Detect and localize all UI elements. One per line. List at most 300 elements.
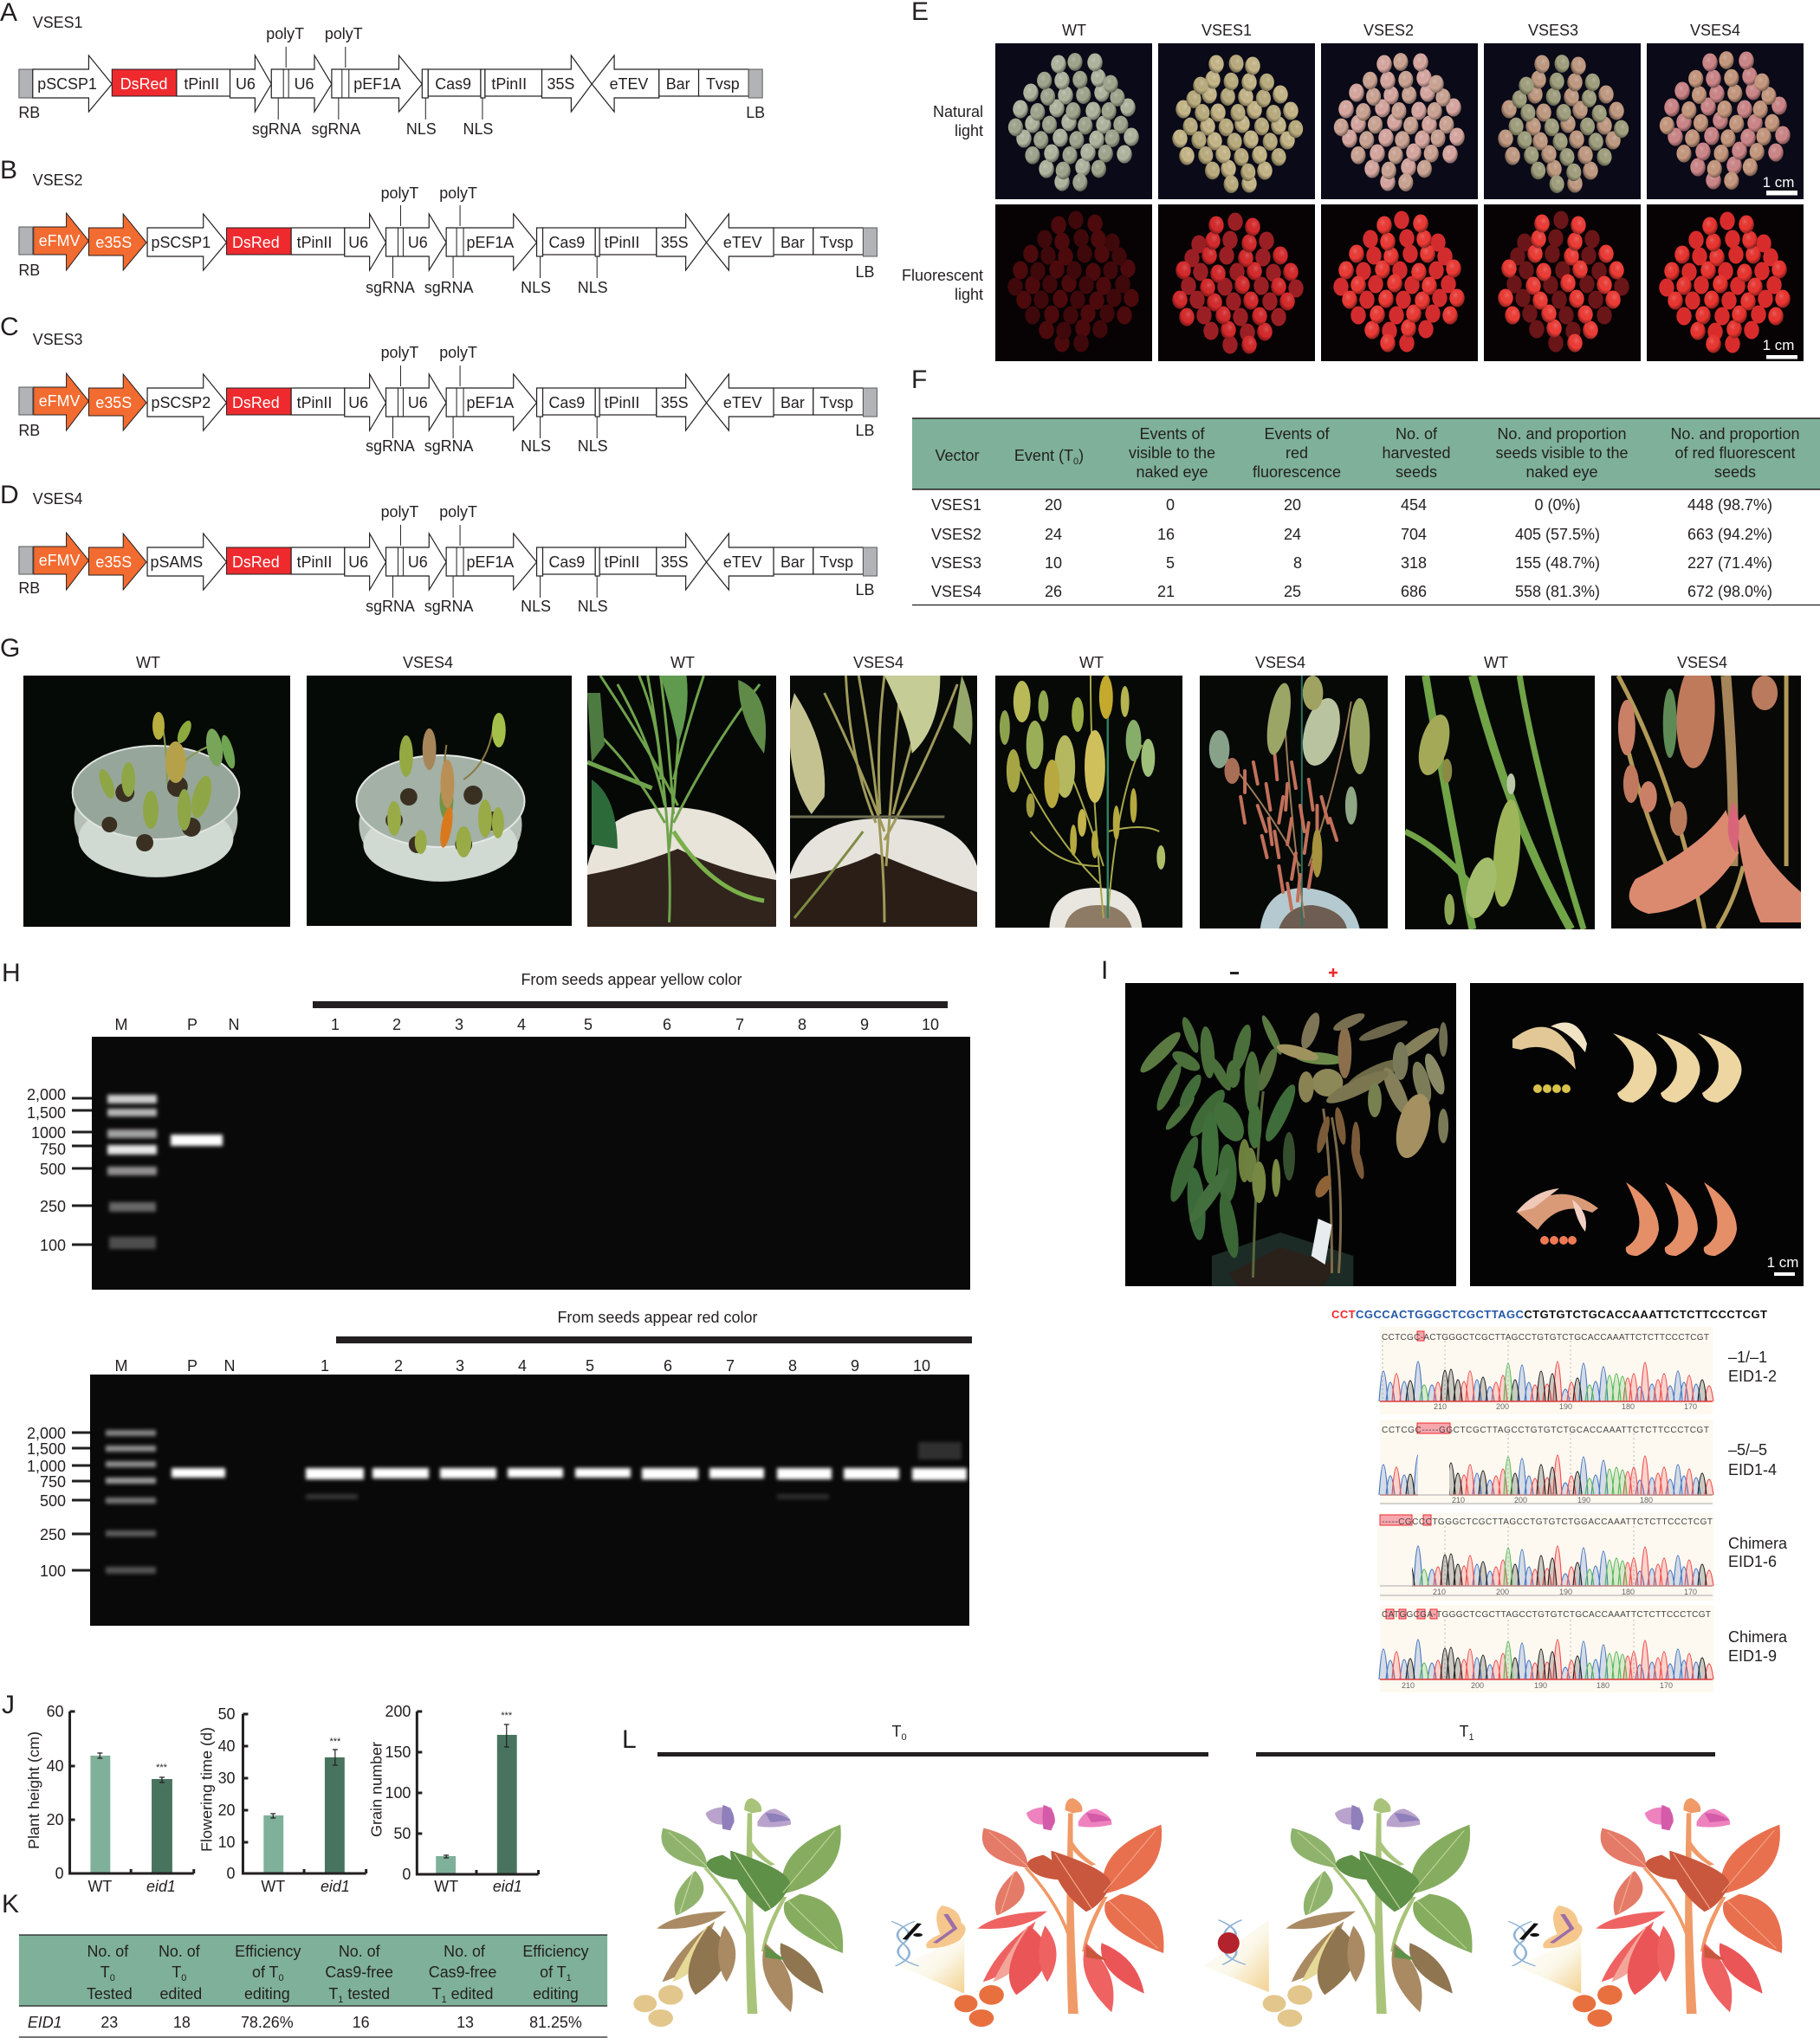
panel F: table of seed colour statistics: 20 — [1045, 496, 1062, 514]
gel 1 lane labels: 5 — [584, 1016, 593, 1033]
panel K: editing efficiency table: 0 — [181, 1973, 186, 1983]
chromatogram: EID1-6: 180 — [1622, 1588, 1635, 1596]
genotype label EID1-4: –5/–5 — [1728, 1441, 1767, 1459]
panel D: VSES4 construct: LB — [856, 581, 874, 598]
panel A: VSES1 construct: polyT — [325, 25, 363, 42]
panel A: VSES1 construct: DsRed — [120, 75, 167, 93]
panel C: VSES3 construct: Bar — [780, 394, 805, 411]
photo: yellow and red pods with seeds — [1470, 983, 1804, 1286]
seed photo: VSES4 natural light — [1647, 43, 1804, 199]
chromatogram: EID1-9: 210 — [1402, 1681, 1415, 1690]
gel 2 lane labels: N — [223, 1357, 236, 1375]
T1 heading: 1 — [1468, 1732, 1474, 1743]
panel A: VSES1 construct: tPinII — [184, 75, 219, 93]
panel F: table of seed colour statistics: 686 — [1401, 583, 1427, 600]
panel K: editing efficiency table: 1 — [567, 1973, 572, 1983]
chromatogram: EID1-6: 210 — [1433, 1588, 1446, 1596]
seed photo: VSES4 natural light: 1 cm — [1763, 174, 1794, 191]
bar chart: grain number — [368, 1703, 539, 1895]
panel E: row labels: light — [955, 122, 983, 139]
panel A: VSES1 construct: Bar — [666, 75, 690, 93]
gel 2 lane labels: 8 — [788, 1357, 797, 1375]
panel K: editing efficiency table: Efficiency — [235, 1943, 301, 1960]
panel C: VSES3 construct: pEF1A — [467, 394, 514, 411]
panel A: VSES1 construct: tPinII — [491, 75, 527, 93]
panel A: VSES1 construct: sgRNA — [312, 120, 360, 138]
gel 1 size markers: 250 — [40, 1198, 66, 1215]
panel F: table of seed colour statistics: 454 — [1401, 496, 1427, 514]
panel F: table of seed colour statistics: 663 (94.2%) — [1687, 526, 1772, 543]
panel F: table of seed colour statistics: seeds — [1714, 463, 1756, 481]
seed photo: VSES3 natural light — [1484, 43, 1641, 199]
panel F: table of seed colour statistics: 405 (57.5%) — [1515, 526, 1600, 543]
panel E: row labels: Natural — [933, 103, 983, 120]
bar chart: plant height: WT — [87, 1878, 112, 1895]
panel F: table of seed colour statistics: 318 — [1401, 554, 1427, 572]
panel F: table of seed colour statistics: seeds — [1396, 463, 1437, 481]
panel F: table of seed colour statistics: Vector — [935, 447, 980, 464]
photo: WT stem base in white pot — [587, 676, 776, 927]
seed photo: VSES2 fluorescence — [1321, 204, 1478, 361]
bar chart: plant height — [25, 1703, 194, 1895]
panel K: editing efficiency table: Tested — [87, 1985, 133, 2002]
chromatogram: EID1-9: CATGGCGA-TGGGCTCGCTTAGCCTGTGTCTGCACCAAATTCTCTTCCCTCGT — [1382, 1610, 1711, 1620]
panel C: VSES3 construct: e35S — [95, 394, 132, 411]
panel E: seed column headings: VSES2 — [1363, 22, 1414, 39]
panel F: table of seed colour statistics: 5 — [1166, 554, 1175, 572]
T1 heading: T — [1459, 1723, 1468, 1740]
gel 2 size markers: 1,500 — [27, 1440, 66, 1458]
photo: VSES4 plantlets in dish — [307, 676, 572, 926]
panel C: VSES3 construct: VSES3 — [33, 331, 82, 348]
panel B: VSES2 construct: NLS — [578, 279, 608, 296]
photo: VSES4 red pods close-up — [1611, 676, 1801, 928]
panel E: row labels — [902, 103, 983, 303]
gel 1 lane labels: 4 — [517, 1016, 526, 1033]
gel 2 size markers: 250 — [40, 1526, 66, 1543]
panel F: table of seed colour statistics: No. of — [1396, 425, 1438, 443]
bar chart: plant height: 40 — [47, 1757, 64, 1775]
bar chart: grain number: 150 — [385, 1744, 411, 1761]
panel B: VSES2 construct: U6 — [348, 234, 368, 251]
chromatogram: EID1-4: 210 — [1452, 1496, 1465, 1504]
panel D: VSES4 construct: RB — [18, 579, 40, 597]
gel 1 lane labels: 3 — [455, 1016, 463, 1033]
panel letter J: J — [2, 1691, 15, 1719]
panel D: VSES4 construct: sgRNA — [366, 598, 415, 615]
panel K: editing efficiency table: 13 — [457, 2014, 474, 2031]
genotype label EID1-9: EID1-9 — [1728, 1647, 1777, 1665]
panel K: editing efficiency table: EID1 — [28, 2014, 62, 2031]
panel D: VSES4 construct: 35S — [661, 553, 689, 571]
panel D: VSES4 construct: NLS — [521, 598, 551, 615]
gel 2 lane labels: 1 — [321, 1357, 329, 1375]
chromatogram: EID1-4: 180 — [1640, 1496, 1653, 1504]
gel 1 lane labels: 6 — [663, 1016, 671, 1033]
panel F: table of seed colour statistics: VSES1 — [931, 496, 981, 514]
chromatogram: EID1-6: 170 — [1684, 1588, 1697, 1596]
gel 2 lane labels — [114, 1357, 930, 1375]
panel D: VSES4 construct: Cas9 — [549, 553, 585, 571]
panel A: VSES1 construct: U6 — [236, 75, 256, 93]
bar chart: grain number: 100 — [385, 1784, 411, 1802]
panel F: table of seed colour statistics: No. and proportion — [1497, 425, 1627, 443]
panel F: table of seed colour statistics: 24 — [1284, 526, 1301, 543]
photo: WT green pods close-up — [1405, 676, 1595, 929]
gel 2 lane labels: P — [187, 1357, 198, 1375]
panel F: table of seed colour statistics: VSES2 — [931, 526, 981, 543]
panel E: seed column headings: VSES1 — [1201, 22, 1252, 39]
panel C: VSES3 construct: sgRNA — [424, 437, 473, 455]
panel letter D: D — [0, 481, 19, 509]
panel E: seed column headings: WT — [1062, 22, 1086, 39]
minus sign — [1230, 972, 1239, 974]
panel F: table of seed colour statistics: red — [1286, 444, 1308, 462]
panel D: VSES4 construct: VSES4 — [33, 490, 82, 508]
panel G: photo headings: VSES4 — [403, 654, 453, 671]
panel letter H: H — [2, 959, 21, 987]
panel B: VSES2 construct: tPinII — [297, 234, 332, 251]
bar chart: flowering time: WT — [261, 1878, 285, 1895]
bar chart: plant height: 60 — [47, 1703, 64, 1720]
panel K: editing efficiency table: edited — [447, 1985, 493, 2002]
panel A: VSES1 construct: 35S — [547, 75, 574, 93]
panel C: VSES3 construct: polyT — [439, 344, 477, 361]
bar chart: flowering time: Flowering time (d) — [198, 1727, 216, 1852]
panel A: VSES1 construct: sgRNA — [252, 120, 301, 138]
chromatogram: EID1-6: -----CGCCCTGGGCTCGCTTAGCCTGTGTCTGGACCAAATTCTCTTCCCTCGT — [1382, 1517, 1713, 1527]
photo: yellow and red pods with seeds: 1 cm — [1767, 1254, 1798, 1271]
panel K: editing efficiency table: editing — [244, 1985, 290, 2002]
icon: DNA scissors and protein with light cone, first — [891, 1905, 966, 1994]
panel G: photo headings — [136, 654, 1727, 671]
T0 heading: T — [891, 1723, 901, 1740]
panel D: VSES4 construct — [18, 490, 877, 615]
T1 bar — [1256, 1752, 1715, 1757]
panel B: VSES2 construct: DsRed — [232, 234, 280, 251]
gel 2 lane labels: 10 — [913, 1357, 930, 1375]
panel C: VSES3 construct: eTEV — [723, 394, 762, 411]
gel 1 lane labels: 1 — [331, 1016, 340, 1033]
seed photo: VSES3 fluorescence — [1484, 204, 1641, 361]
panel A: VSES1 construct: Tvsp — [706, 75, 740, 93]
chromatogram: EID1-6 — [1377, 1513, 1713, 1601]
panel K: editing efficiency table: edited — [159, 1985, 202, 2002]
panel C: VSES3 construct: 35S — [661, 394, 689, 411]
panel G: photo headings: WT — [670, 654, 695, 671]
panel B: VSES2 construct: eFMV — [39, 232, 81, 249]
panel F: table of seed colour statistics: seeds visible to the — [1495, 444, 1629, 462]
illustration: red-seed plant T0 — [955, 1798, 1163, 2027]
gel 1 lane labels: 9 — [860, 1016, 869, 1033]
panel E: seed column headings: VSES3 — [1528, 22, 1578, 39]
bar chart: plant height: eid1 — [146, 1878, 176, 1895]
panel K: editing efficiency table: T — [100, 1964, 110, 1981]
gel 2 lane labels: 5 — [586, 1357, 594, 1375]
panel F: table of seed colour statistics: 0 — [1166, 496, 1175, 514]
panel C: VSES3 construct — [18, 331, 877, 455]
panel B: VSES2 construct: pSCSP1 — [152, 234, 210, 251]
bar chart: plant height: 20 — [47, 1811, 64, 1828]
panel letter G: G — [0, 634, 20, 663]
chromatogram: EID1-9: 190 — [1534, 1681, 1547, 1690]
seed photo: WT fluorescence — [995, 204, 1152, 361]
panel letter L: L — [622, 1725, 637, 1754]
panel G: photo headings: WT — [1484, 654, 1508, 671]
chromatogram: EID1-4: 200 — [1514, 1496, 1527, 1504]
seed photo: VSES4 fluorescence — [1647, 204, 1804, 361]
panel B: VSES2 construct: Cas9 — [549, 234, 585, 251]
gel 2 size markers: 500 — [40, 1492, 66, 1510]
gel 1 size markers: 2,000 — [27, 1086, 66, 1103]
panel B: VSES2 construct: RB — [18, 262, 40, 279]
panel B: VSES2 construct: 35S — [661, 234, 689, 251]
panel letter I: I — [1101, 956, 1108, 985]
panel K: editing efficiency table: of T — [252, 1964, 278, 1981]
panel B: VSES2 construct — [18, 171, 877, 296]
panel G: photo headings: WT — [1079, 654, 1104, 671]
panel C: VSES3 construct: sgRNA — [366, 437, 415, 455]
panel D: VSES4 construct: eTEV — [723, 553, 762, 571]
chromatogram: EID1-2: 190 — [1559, 1402, 1572, 1411]
panel B: VSES2 construct: Tvsp — [819, 234, 853, 251]
T0 bar — [657, 1752, 1208, 1757]
panel F: table of seed colour statistics: No. and proportion — [1670, 425, 1800, 443]
chromatogram: EID1-2 — [1379, 1327, 1713, 1414]
gel 1 lane labels: 8 — [798, 1016, 806, 1033]
gel 1 title: yellow seeds: From seeds appear yellow color — [521, 971, 742, 988]
panel C: VSES3 construct: LB — [856, 422, 874, 439]
panel G: photo headings: VSES4 — [853, 654, 904, 671]
panel C: VSES3 construct: Cas9 — [549, 394, 585, 411]
panel F: table of seed colour statistics: ) — [1078, 447, 1084, 464]
panel F: table of seed colour statistics: 26 — [1045, 583, 1062, 600]
panel A: VSES1 construct: RB — [18, 104, 40, 121]
panel E: row labels: light — [955, 286, 983, 303]
panel C: VSES3 construct: U6 — [348, 394, 368, 411]
gel 1 size markers: 500 — [40, 1161, 66, 1178]
seed photo: WT natural light — [995, 43, 1152, 199]
bar chart: flowering time — [198, 1705, 366, 1895]
panel G: photo headings: VSES4 — [1255, 654, 1305, 671]
gel 2 image — [90, 1375, 969, 1626]
bar chart: flowering time: 10 — [218, 1834, 236, 1851]
gel 1 sample bar — [313, 1001, 948, 1008]
panel D: VSES4 construct: DsRed — [232, 553, 280, 571]
panel A: VSES1 construct: NLS — [406, 120, 437, 138]
panel G: photo headings: VSES4 — [1677, 654, 1727, 671]
gel 2 size markers: 750 — [40, 1473, 66, 1491]
gel 2 lane labels: M — [114, 1357, 128, 1375]
genotype label EID1-4: EID1-4 — [1728, 1461, 1777, 1478]
panel A: VSES1 construct: U6 — [295, 75, 314, 93]
gel 1 size markers: 1,500 — [27, 1104, 66, 1122]
panel F: table of seed colour statistics: VSES4 — [931, 583, 981, 600]
gel 1 size markers: 750 — [40, 1141, 66, 1158]
gel 1 size markers: 1000 — [31, 1124, 66, 1142]
gel 1 lane labels: M — [114, 1016, 128, 1033]
panel C: VSES3 construct: DsRed — [232, 394, 280, 411]
gel 2 lane labels: 6 — [664, 1357, 672, 1375]
panel C: VSES3 construct: NLS — [521, 437, 551, 455]
target sequence: CCTCGCCACTGGGCTCGCTTAGCCTGTGTCTGCACCAAATTCTCTTCCCTCGT — [1331, 1308, 1767, 1321]
panel F: table of seed colour statistics: 0 (0%) — [1534, 496, 1581, 514]
panel F: table of seed colour statistics: 704 — [1401, 526, 1427, 543]
bar chart: flowering time: 30 — [218, 1770, 236, 1787]
panel A: VSES1 construct: pEF1A — [353, 75, 401, 93]
gel 2 lane labels: 2 — [394, 1357, 403, 1375]
panel K: editing efficiency table: T — [172, 1964, 181, 1981]
panel B: VSES2 construct: e35S — [95, 234, 132, 251]
panel K: editing efficiency table: No. of — [87, 1943, 129, 1960]
panel F: table of seed colour statistics: 558 (81.3%) — [1515, 583, 1600, 600]
gel 2 title: red seeds: From seeds appear red color — [557, 1309, 758, 1326]
panel A: VSES1 construct: pSCSP1 — [37, 75, 97, 93]
genotype label EID1-6 — [1728, 1535, 1788, 1570]
panel A: VSES1 construct: VSES1 — [33, 14, 82, 31]
panel B: VSES2 construct: polyT — [439, 184, 477, 202]
panel A: VSES1 construct — [18, 14, 765, 138]
panel K: editing efficiency table: 0 — [110, 1973, 115, 1983]
panel K: editing efficiency table: tested — [343, 1985, 390, 2002]
illustration: red-seed plant T1 — [1572, 1798, 1782, 2027]
panel D: VSES4 construct: U6 — [348, 553, 368, 571]
panel letter K: K — [2, 1890, 19, 1918]
gel 1 lane labels: 2 — [392, 1016, 401, 1033]
panel K: editing efficiency table: No. of — [339, 1943, 381, 1960]
panel F: table of seed colour statistics: harvested — [1382, 444, 1451, 462]
gel 2 sample bar — [336, 1336, 972, 1343]
seed photo: VSES1 fluorescence — [1158, 204, 1315, 361]
illustration: yellow-seed green plant T0 — [633, 1798, 843, 2027]
panel F: table of seed colour statistics: 448 (98.7%) — [1687, 496, 1772, 514]
panel K: editing efficiency table: Cas9-free — [429, 1964, 496, 1981]
panel F: table of seed colour statistics: 8 — [1293, 554, 1302, 572]
panel E: seed column headings: VSES4 — [1690, 22, 1740, 39]
panel F: table of seed colour statistics: 227 (71.4%) — [1687, 554, 1772, 572]
panel B: VSES2 construct: sgRNA — [424, 279, 473, 296]
panel F: table of seed colour statistics: of red fluorescent — [1674, 444, 1796, 462]
panel A: VSES1 construct: NLS — [463, 120, 493, 138]
gel 2 size markers: 1,000 — [27, 1458, 66, 1475]
panel B: VSES2 construct: LB — [856, 263, 874, 281]
panel C: VSES3 construct: pSCSP2 — [152, 394, 210, 411]
panel F: table of seed colour statistics: 10 — [1045, 554, 1062, 572]
panel A: VSES1 construct: LB — [746, 104, 765, 121]
icon: DNA with red cassette and light cone — [1203, 1920, 1269, 1992]
panel A: VSES1 construct: eTEV — [610, 75, 648, 93]
panel K: editing efficiency table — [19, 1935, 607, 2037]
panel B: VSES2 construct: tPinII — [605, 234, 639, 251]
panel F: table of seed colour statistics: 0 — [1073, 456, 1078, 467]
panel K: editing efficiency table: 1 — [442, 1995, 447, 2005]
panel K: editing efficiency table: T — [432, 1985, 442, 2002]
panel K: editing efficiency table: editing — [533, 1985, 579, 2002]
panel F: table of seed colour statistics — [912, 418, 1820, 605]
panel F: table of seed colour statistics: 155 (48.7%) — [1515, 554, 1600, 572]
panel E: row labels: Fluorescent — [902, 267, 983, 284]
chromatogram: EID1-6: 190 — [1559, 1588, 1572, 1596]
panel F: table of seed colour statistics: naked eye — [1525, 463, 1598, 481]
bar chart: plant height: *** — [156, 1763, 168, 1773]
chromatogram: EID1-2: 180 — [1622, 1402, 1635, 1411]
panel D: VSES4 construct: sgRNA — [424, 598, 473, 615]
panel B: VSES2 construct: Bar — [780, 234, 805, 251]
chromatogram: EID1-6: 200 — [1496, 1588, 1509, 1596]
panel D: VSES4 construct: eFMV — [39, 552, 81, 569]
chromatogram: EID1-2: 210 — [1434, 1402, 1447, 1411]
gel 2 size markers — [27, 1425, 90, 1580]
photo: WT whole plant with yellow leaves — [995, 676, 1182, 928]
bar chart: grain number: Grain number — [368, 1742, 385, 1837]
panel D: VSES4 construct: pSAMS — [151, 553, 203, 571]
seed photo: VSES1 natural light — [1158, 43, 1315, 199]
panel B: VSES2 construct: sgRNA — [366, 279, 415, 296]
panel D: VSES4 construct: polyT — [381, 503, 418, 521]
gel 1 lane labels: P — [187, 1016, 198, 1033]
panel D: VSES4 construct: tPinII — [605, 553, 639, 571]
gel 2 lane labels: 9 — [851, 1357, 859, 1375]
panel F: table of seed colour statistics: visible to the — [1129, 444, 1215, 462]
bar chart: grain number: eid1 — [493, 1878, 522, 1895]
panel F: table of seed colour statistics: 672 (98.0%) — [1687, 583, 1772, 600]
gel 1 size markers — [27, 1086, 92, 1254]
panel D: VSES4 construct: pEF1A — [467, 553, 514, 571]
icon: DNA scissors and protein with light cone, second — [1508, 1905, 1583, 1994]
panel K: editing efficiency table: of T — [540, 1964, 567, 1981]
panel K: editing efficiency table: 81.25% — [529, 2014, 582, 2031]
bar chart: grain number: WT — [434, 1878, 458, 1895]
panel B: VSES2 construct: pEF1A — [467, 234, 514, 251]
panel K: editing efficiency table: 0 — [278, 1973, 284, 1983]
panel K: editing efficiency table: Efficiency — [522, 1943, 589, 1960]
panel B: VSES2 construct: VSES2 — [33, 171, 82, 189]
T0 heading: 0 — [901, 1732, 907, 1743]
gel 1 lane labels: 7 — [735, 1016, 744, 1033]
panel F: table of seed colour statistics: Event (T — [1014, 447, 1073, 464]
chromatogram: EID1-4: 190 — [1577, 1496, 1590, 1504]
panel B: VSES2 construct: NLS — [521, 279, 551, 296]
genotype label EID1-2: –1/–1 — [1728, 1349, 1767, 1366]
gel 1 lane labels: 10 — [922, 1016, 939, 1033]
genotype label EID1-4 — [1728, 1441, 1777, 1478]
bar chart: plant height: 0 — [55, 1865, 64, 1882]
panel F: table of seed colour statistics: 25 — [1284, 583, 1301, 600]
panel C: VSES3 construct: eFMV — [39, 392, 81, 410]
gel 2 lane labels: 3 — [456, 1357, 464, 1375]
genotype label EID1-2 — [1728, 1349, 1777, 1385]
chromatogram: EID1-9: 170 — [1660, 1681, 1673, 1690]
genotype label EID1-9 — [1728, 1628, 1788, 1665]
chromatogram: EID1-4 — [1379, 1420, 1713, 1504]
bar chart: flowering time: 50 — [218, 1705, 236, 1723]
panel A: VSES1 construct: polyT — [266, 25, 304, 42]
bar chart: grain number: 0 — [402, 1866, 411, 1883]
panel F: table of seed colour statistics: 24 — [1045, 526, 1062, 543]
bar chart: flowering time: 40 — [218, 1737, 236, 1755]
gel 2 lane labels: 7 — [726, 1357, 735, 1375]
gel 1 size markers: 100 — [40, 1237, 66, 1254]
bar chart: flowering time: *** — [329, 1737, 341, 1747]
photo: VSES4 stem base in white pot — [790, 676, 977, 927]
panel letter C: C — [0, 313, 19, 341]
seed photo: VSES4 fluorescence: 1 cm — [1763, 337, 1794, 353]
chromatogram: EID1-9: 180 — [1597, 1681, 1610, 1690]
panel C: VSES3 construct: tPinII — [605, 394, 639, 411]
chromatogram: EID1-2: CCTCGC-ACTGGGCTCGCTTAGCCTGTGTCTGCACCAAATTCTCTTCCCTCGT — [1382, 1333, 1709, 1342]
bar chart: plant height: Plant height (cm) — [25, 1731, 42, 1849]
panel D: VSES4 construct: e35S — [95, 553, 132, 571]
